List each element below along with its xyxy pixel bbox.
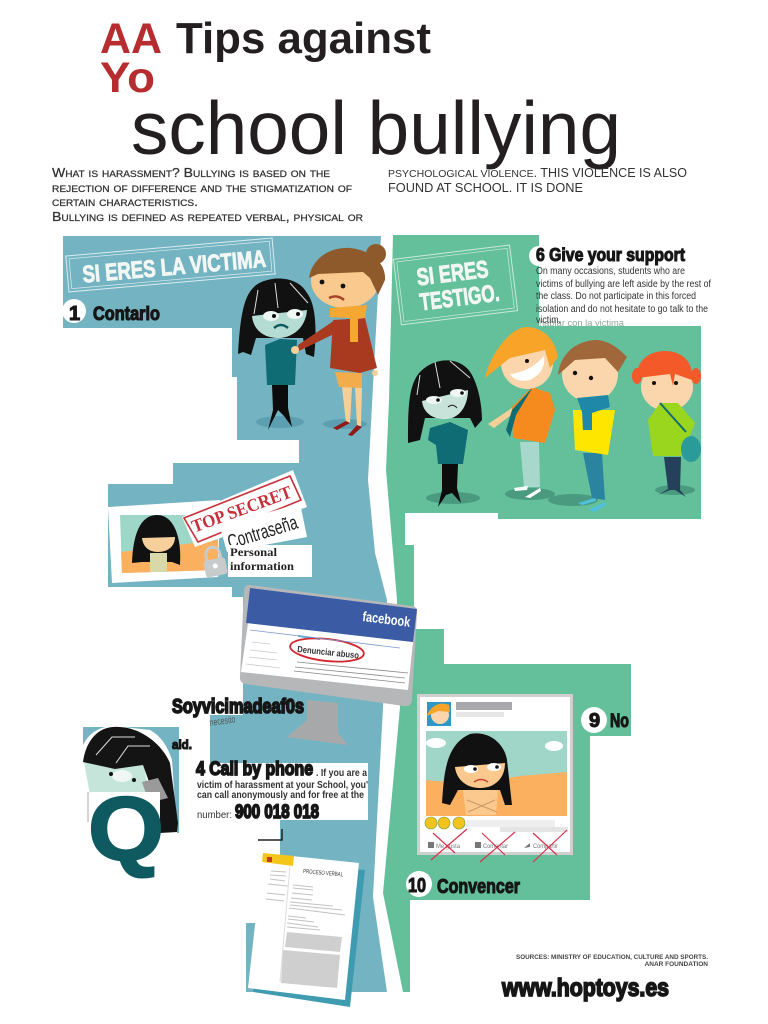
step 10: convencer: 10 [408,875,426,897]
top secret paper [182,470,307,547]
step 4: call by phone [196,759,368,840]
intro text right column: PSYCHOLOGICAL VIOLENCE. THIS VIOLENCE IS ALSO [388,166,687,180]
step 10: convencer: Convencer [437,876,520,898]
step 6: give your support: isolation and do not hesitate to go talk to the [536,304,708,315]
step 6: give your support: victim. [536,315,561,326]
action buttons: Me gusta [436,844,461,850]
illustration: victim girl [238,278,316,430]
step 9: no: No [610,711,629,732]
step 4: call by phone: 4 Call by phone [196,759,313,780]
illustration: boy with blue scarf [548,340,627,512]
step 1: contarlo: 1 [69,303,80,325]
step 4: call by phone: victim of harassment at your School, you' [197,780,368,791]
document: proceso verbal: PROCESO VERBAL [303,869,344,879]
step 6: give your support: the class. Do not participate in this forced [536,291,696,302]
avatar [427,702,451,726]
soyvicimadeaf0s handle: ald. [172,737,192,752]
step 6: give your support [529,245,711,326]
action buttons [428,842,558,850]
red crosses [431,829,567,862]
website: www.hoptoys.es [501,974,669,1002]
sources: ANAR FOUNDATION [645,961,708,968]
soyvicimadeaf0s handle: necesito [209,714,236,729]
photo [108,500,220,583]
title: AA [100,15,162,63]
title: school bullying [131,86,621,170]
step 6: give your support: On many occasions, students who are [536,266,685,277]
title: Yo [100,54,155,102]
monitor with facebook report page [240,585,417,745]
intro text left column: What is harassment? Bullying is based on the [52,166,330,180]
post photo [426,731,567,816]
photo card with top secret stamp [108,470,312,583]
intro text left column: rejection of difference and the stigmatization of [52,181,353,195]
illustration: girl with red hair [632,351,701,497]
report abuse link: Denunciar abuso [297,644,360,661]
intro text left column [52,166,364,224]
facebook header [246,588,417,642]
personal information label: Personal [230,545,278,559]
panel: witness background [383,235,701,992]
step 1: contarlo [62,299,160,325]
action buttons: Comentar [483,844,508,850]
illustration: boy with orange hair [485,327,558,500]
illustration: girl on phone with Q: Q [88,780,164,880]
step 6: give your support: victims of bullying are left aside by the rest of [536,279,711,290]
banner: si eres testigo [393,245,518,325]
faint underlying text: hablar con la victima [539,318,624,328]
illustration: teacher [291,244,386,436]
soyvicimadeaf0s handle [172,696,304,752]
laughing emojis [425,817,465,829]
panel: victim background [63,236,387,992]
sources: SOURCES: MINISTRY OF EDUCATION, CULTURE AND SPORTS. [516,954,708,961]
soyvicimadeaf0s handle: Soyvicimadeaf0s [172,696,304,718]
intro text right column: FOUND AT SCHOOL. IT IS DONE [388,181,583,195]
facebook post mockup [417,694,573,862]
intro text right column [388,166,687,195]
step 4: call by phone: . If you are a [316,768,367,779]
step 9: no: 9 [589,710,600,732]
top secret paper: TOP SECRET [189,482,294,536]
monitor with facebook report page: facebook [362,608,411,630]
step 4: call by phone: can call anonymously and for free at the [197,790,364,801]
title [100,14,621,170]
document: proceso verbal [248,853,365,1007]
monitor stand [287,700,348,745]
icon: padlock [200,545,228,578]
step 4: call by phone: 900 018 018 [235,802,319,823]
sources [516,954,708,968]
banner: si eres testigo: SI ERES [415,256,490,291]
white patch in witness panel [405,513,498,545]
intro text left column: Bullying is defined as repeated verbal, physical or [52,210,364,224]
step 1: contarlo: Contarlo [93,304,160,325]
personal information label: information [230,559,294,573]
banner: si eres la victima [66,238,275,292]
step 10: convencer [406,871,520,898]
report abuse link [289,635,365,665]
step 9: no [581,707,629,733]
monitor frame [240,585,417,706]
personal information label [228,545,312,577]
step 4: call by phone: number: [197,810,232,821]
action buttons: Compartir [533,844,558,850]
step 6: give your support: 6 Give your support [536,245,685,265]
illustration: victim among witnesses [408,360,482,507]
banner: si eres la victima: SI ERES LA VICTIMA [81,246,267,289]
title: Tips against [176,14,431,63]
intro text left column: certain characteristics. [52,195,198,209]
contraseña label: Contraseña [225,512,301,554]
illustration: girl on phone with Q [83,726,179,880]
banner: si eres testigo: TESTIGO. [418,280,501,316]
